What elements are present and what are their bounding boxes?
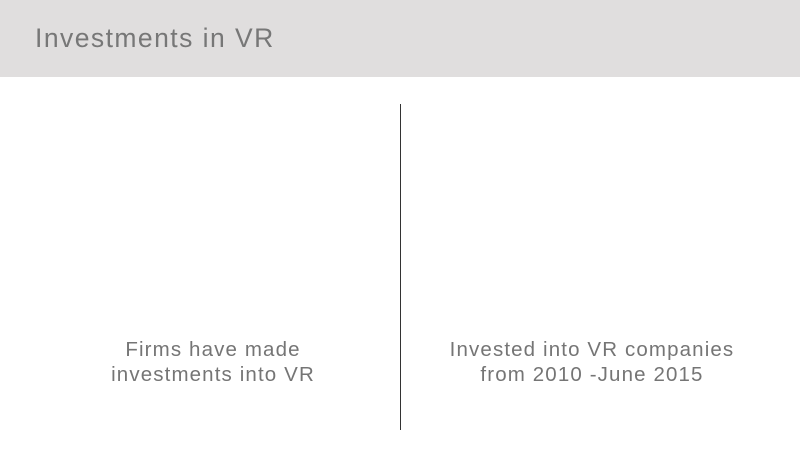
title: Investments in VR	[35, 23, 275, 53]
center divider	[400, 104, 401, 430]
right caption: from 2010 -June 2015	[480, 362, 704, 386]
right caption	[450, 338, 734, 386]
right caption: Invested into VR companies	[450, 338, 734, 361]
header band	[0, 0, 800, 77]
left caption: Firms have made	[125, 338, 301, 361]
left caption: investments into VR	[111, 362, 315, 386]
left caption	[111, 338, 315, 386]
